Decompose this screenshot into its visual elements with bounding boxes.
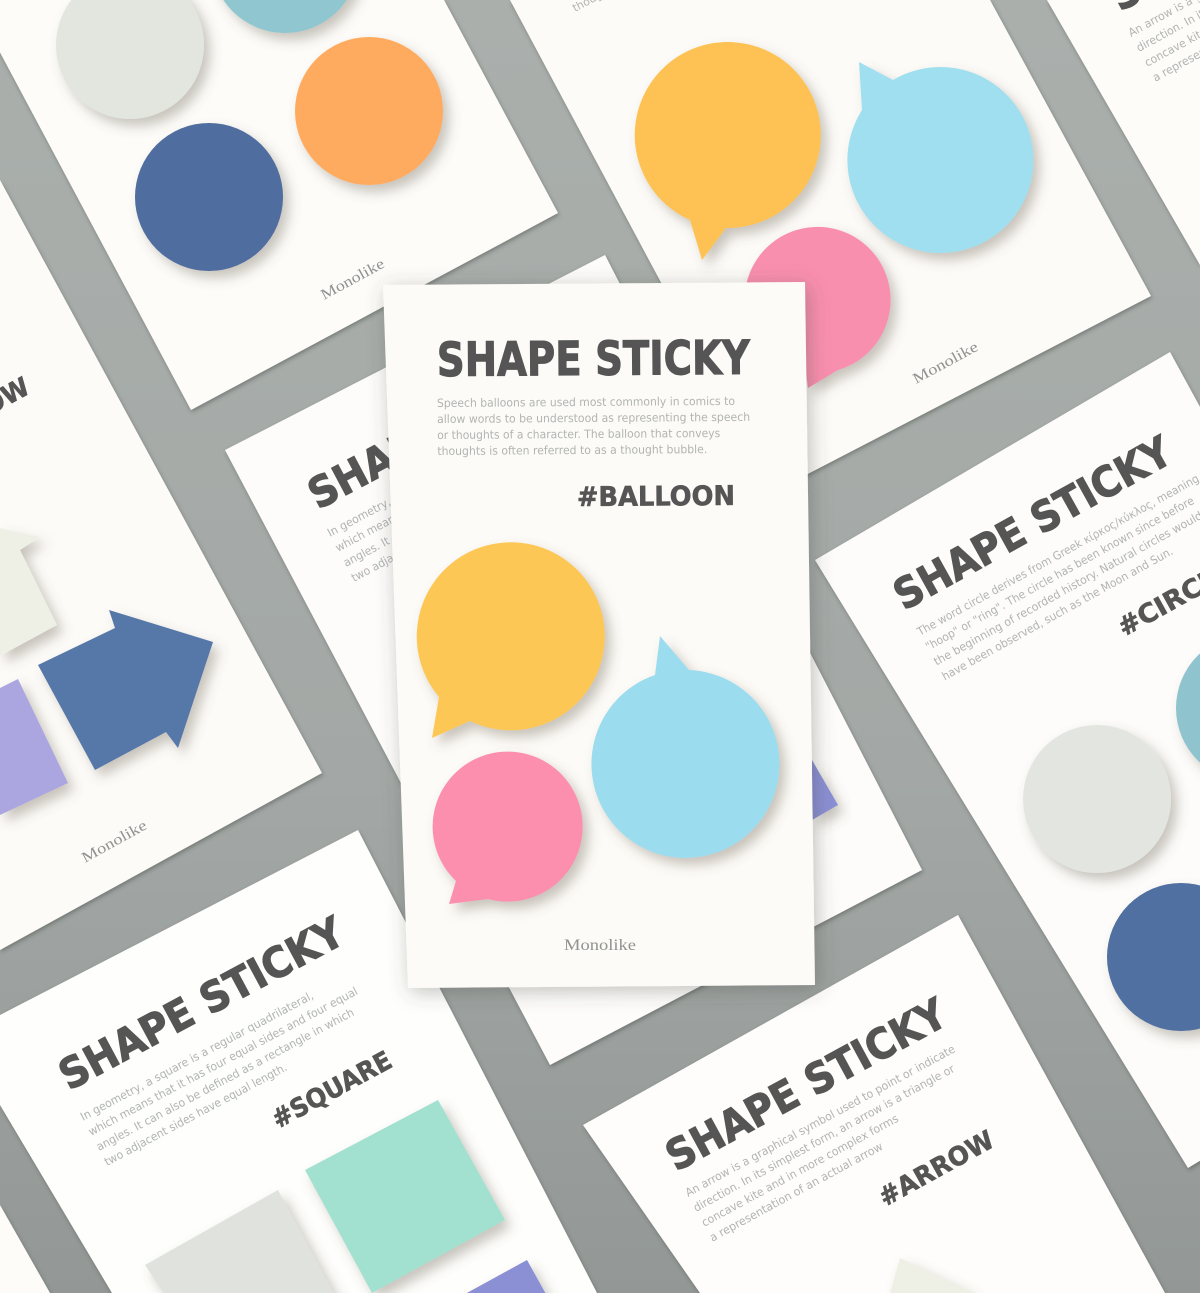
brand: Monolike: Monolike [564,937,636,954]
description: or thoughts of a character. The balloon that conveys [437,426,720,442]
description: direction. In its simplest form, an arrow is a triangle or [691,1061,957,1215]
description: have been observed, such as the Moon and Sun. [939,544,1175,683]
icon: mint square sticker [305,1100,505,1293]
icon: orange circle sticker [295,37,443,185]
title: SHAPE STICKY [51,907,353,1100]
description [437,394,750,458]
brand: Monolike: Monolike [910,339,982,388]
description: concave kite and in more complex forms [699,1111,901,1230]
icon: teal circle sticker [1176,634,1200,782]
icon: pink balloon sticker [433,752,583,904]
hashtag: #BALLOON [577,481,735,513]
icon: yellow balloon sticker [417,542,605,738]
description: Speech balloons are used most commonly in comics to [437,394,735,410]
brand: Monolike: Monolike [79,817,150,866]
icon: blue balloon sticker [847,62,1033,253]
brand: Monolike: Monolike [318,256,388,304]
description: allow words to be understood as representing the speech [437,410,750,426]
description: An arrow is a graphical symbol used to point or indicate [683,1042,957,1200]
text: clipped description [1126,0,1200,84]
icon: grey circle sticker [1023,725,1171,873]
icon: navy circle sticker [135,123,283,271]
description: thoughts is often referred to as a thought bubble. [437,442,707,458]
panel: bottom arrow card [583,915,1165,1293]
text: clipped description: angles. It can also be defined as a rectangle in which [341,421,603,570]
icon: navy circle sticker [1107,883,1200,1031]
description: which means that it has four equal sides and four equal [86,984,360,1139]
icon: grey square sticker [145,1190,340,1293]
description: In geometry, a square is a regular quadrilateral, [78,988,316,1124]
icon: pink balloon sticker [745,227,891,388]
text: clipped description: In geometry, a square is a regular quadrilateral, [325,404,563,540]
icon: blue arrow sticker [38,610,213,770]
hashtag: #SQUARE [267,1046,397,1135]
panel: top-right arrow card [1047,0,1200,265]
icon: cream arrow sticker tip [890,1258,975,1293]
panel: left arrow card [0,180,322,950]
icon: cream arrow sticker [0,528,57,656]
panel: right circle card [815,352,1200,1168]
description: a representation of an actual arrow [707,1139,885,1244]
panel: center balloon card [383,282,815,988]
panel: hidden square card behind center [225,255,922,1065]
title: SHAPE STICKY [885,426,1180,620]
icon: blue balloon sticker [591,636,779,858]
panel: top-left circle card [0,0,558,410]
icon: lavender sticker edge [812,760,838,820]
text: clipped description: which means that it has four equal sides and four equal [333,400,607,555]
hashtag: #ARROW [874,1125,999,1213]
text: clipped title: SHAPE STICKY [300,327,602,519]
title: SHAPE STICKY [437,331,751,388]
title: SHAPE STICKY [657,989,955,1181]
icon: teal circle sticker [211,0,359,33]
panel: top-center balloon card [510,0,1151,492]
description: angles. It can also be defined as a rectangle in which [94,1005,356,1154]
icon: yellow balloon sticker [635,42,821,260]
icon: lavender square sticker [0,679,68,815]
icon: lavender square sticker [445,1260,552,1293]
icon: grey circle sticker [56,0,204,119]
panel: bottom-left square card [0,830,597,1293]
text: clipped description: two adjacent sides have equal length. [349,476,536,585]
panel: bottom-left corner card [0,1205,50,1293]
description: two adjacent sides have equal length. [102,1060,289,1169]
